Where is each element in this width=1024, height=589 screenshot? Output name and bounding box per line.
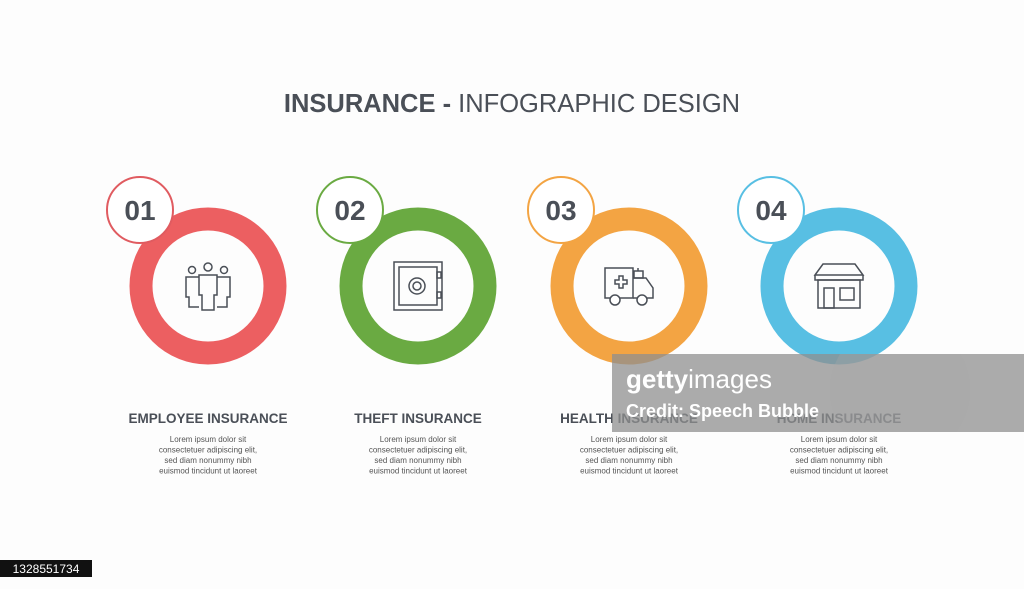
icon: house xyxy=(815,264,863,308)
text 04: consectetuer adipiscing elit, xyxy=(790,446,888,454)
text 02: consectetuer adipiscing elit, xyxy=(369,446,467,454)
text 03: consectetuer adipiscing elit, xyxy=(580,446,678,454)
heading 01: EMPLOYEE INSURANCE xyxy=(128,411,288,426)
title: INSURANCE - INFOGRAPHIC DESIGN xyxy=(284,90,740,118)
id tag: 1328551734 xyxy=(13,562,80,576)
panel: 02 theft xyxy=(317,177,485,476)
watermark band: gettyimages xyxy=(626,364,772,394)
text 01: Lorem ipsum dolor sit xyxy=(170,435,247,444)
ring 03 xyxy=(562,219,696,353)
icon: safe xyxy=(394,262,442,310)
text 01: consectetuer adipiscing elit, xyxy=(159,446,257,454)
text 04: Lorem ipsum dolor sit xyxy=(801,435,878,444)
badge 03 xyxy=(528,177,594,243)
text 03: sed diam nonummy nibh xyxy=(585,456,673,465)
icon: ambulance xyxy=(605,268,653,305)
heading 03: HEALTH INSURANCE xyxy=(560,411,698,426)
ring 04 xyxy=(772,219,906,353)
text 03: euismod tincidunt ut laoreet xyxy=(580,466,679,476)
badge 01 xyxy=(107,177,173,243)
badge 02: 02 xyxy=(334,195,366,226)
badge 03: 03 xyxy=(545,195,577,226)
watermark band xyxy=(612,354,1024,432)
text 02: Lorem ipsum dolor sit xyxy=(380,435,457,444)
icon: people xyxy=(186,263,230,310)
panel: 03 health xyxy=(528,177,698,476)
badge 01: 01 xyxy=(124,195,156,226)
text 02: sed diam nonummy nibh xyxy=(374,456,462,465)
badge 04 xyxy=(738,177,804,243)
ring 01 xyxy=(141,219,275,353)
text 02: euismod tincidunt ut laoreet xyxy=(369,466,468,476)
panel: 04 home xyxy=(738,177,906,476)
text 03: Lorem ipsum dolor sit xyxy=(591,435,668,444)
panel: 01 employee xyxy=(107,177,288,476)
heading 02: THEFT INSURANCE xyxy=(354,411,482,426)
ring 02 xyxy=(351,219,485,353)
badge 04: 04 xyxy=(755,195,787,226)
text 01: sed diam nonummy nibh xyxy=(164,456,252,465)
badge 02 xyxy=(317,177,383,243)
heading 04: HOME INSURANCE xyxy=(777,411,901,426)
text 04: sed diam nonummy nibh xyxy=(795,456,883,465)
id tag xyxy=(0,560,92,577)
watermark band: Credit: Speech Bubble xyxy=(626,401,819,421)
text 04: euismod tincidunt ut laoreet xyxy=(790,466,889,476)
text 01: euismod tincidunt ut laoreet xyxy=(159,466,258,476)
